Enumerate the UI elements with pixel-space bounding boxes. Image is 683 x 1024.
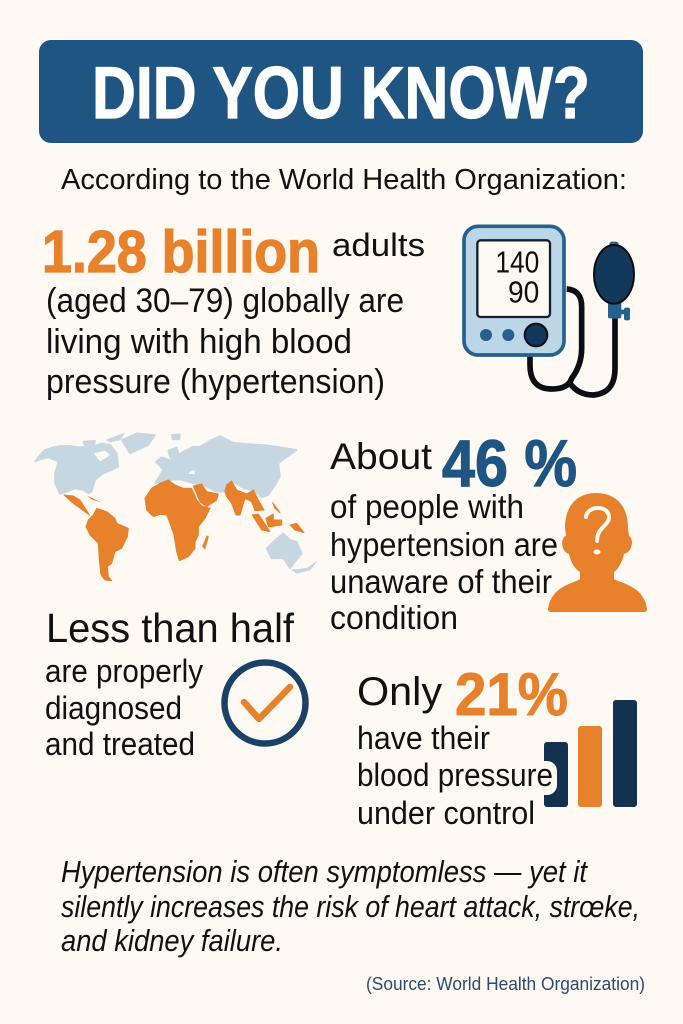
stat: less than half: and treated	[45, 726, 195, 762]
closing statement: and kidney failure.	[61, 923, 283, 958]
title banner: DID YOU KNOW?	[92, 53, 590, 134]
stat: less than half: Less than half	[46, 605, 295, 651]
stat: 46% unaware: 46 %	[442, 426, 577, 500]
stat: 46% unaware: condition	[330, 599, 458, 636]
stat: 1.28 billion adults: living with high blood	[46, 323, 352, 361]
stat: 46% unaware: of people with	[330, 488, 524, 525]
stat: 1.28 billion adults: adults	[332, 227, 425, 263]
icon: check mark circle	[224, 662, 306, 744]
stat: 46% unaware: About	[330, 436, 433, 477]
icon: blood pressure monitor: 140	[495, 245, 539, 279]
stat: less than half: are properly	[45, 653, 203, 689]
stat: less than half: diagnosed	[45, 690, 182, 726]
title banner	[39, 40, 643, 143]
stat: 21% under control: 21%	[455, 661, 568, 728]
stat: 21% under control: Only	[357, 670, 442, 714]
icon: blood pressure monitor	[464, 226, 634, 395]
stat: 46% unaware: hypertension are	[330, 526, 558, 563]
world map	[35, 433, 317, 581]
stat: 1.28 billion adults: 1.28 billion	[42, 219, 320, 285]
stat: 1.28 billion adults: pressure (hypertension)	[46, 363, 385, 401]
icon: blood pressure monitor: 90	[508, 276, 539, 310]
closing statement: Hypertension is often symptomless — yet it	[61, 854, 588, 889]
icon: person with question mark	[548, 493, 647, 612]
stat: 21% under control	[357, 661, 568, 831]
stat: less than half	[45, 605, 295, 762]
icon: bar chart	[530, 700, 637, 807]
stat: 21% under control: blood pressure	[357, 757, 553, 793]
stat: 1.28 billion adults	[42, 219, 425, 401]
stat: 21% under control: under control	[357, 795, 535, 831]
stat: 21% under control: have their	[357, 720, 490, 756]
intro line: According to the World Health Organization:	[61, 164, 627, 196]
closing statement	[61, 854, 640, 958]
stat: 46% unaware	[330, 426, 577, 636]
source line: (Source: World Health Organization)	[366, 973, 645, 994]
stat: 1.28 billion adults: (aged 30–79) globally are	[46, 282, 404, 320]
stat: 46% unaware: unaware of their	[330, 563, 552, 600]
